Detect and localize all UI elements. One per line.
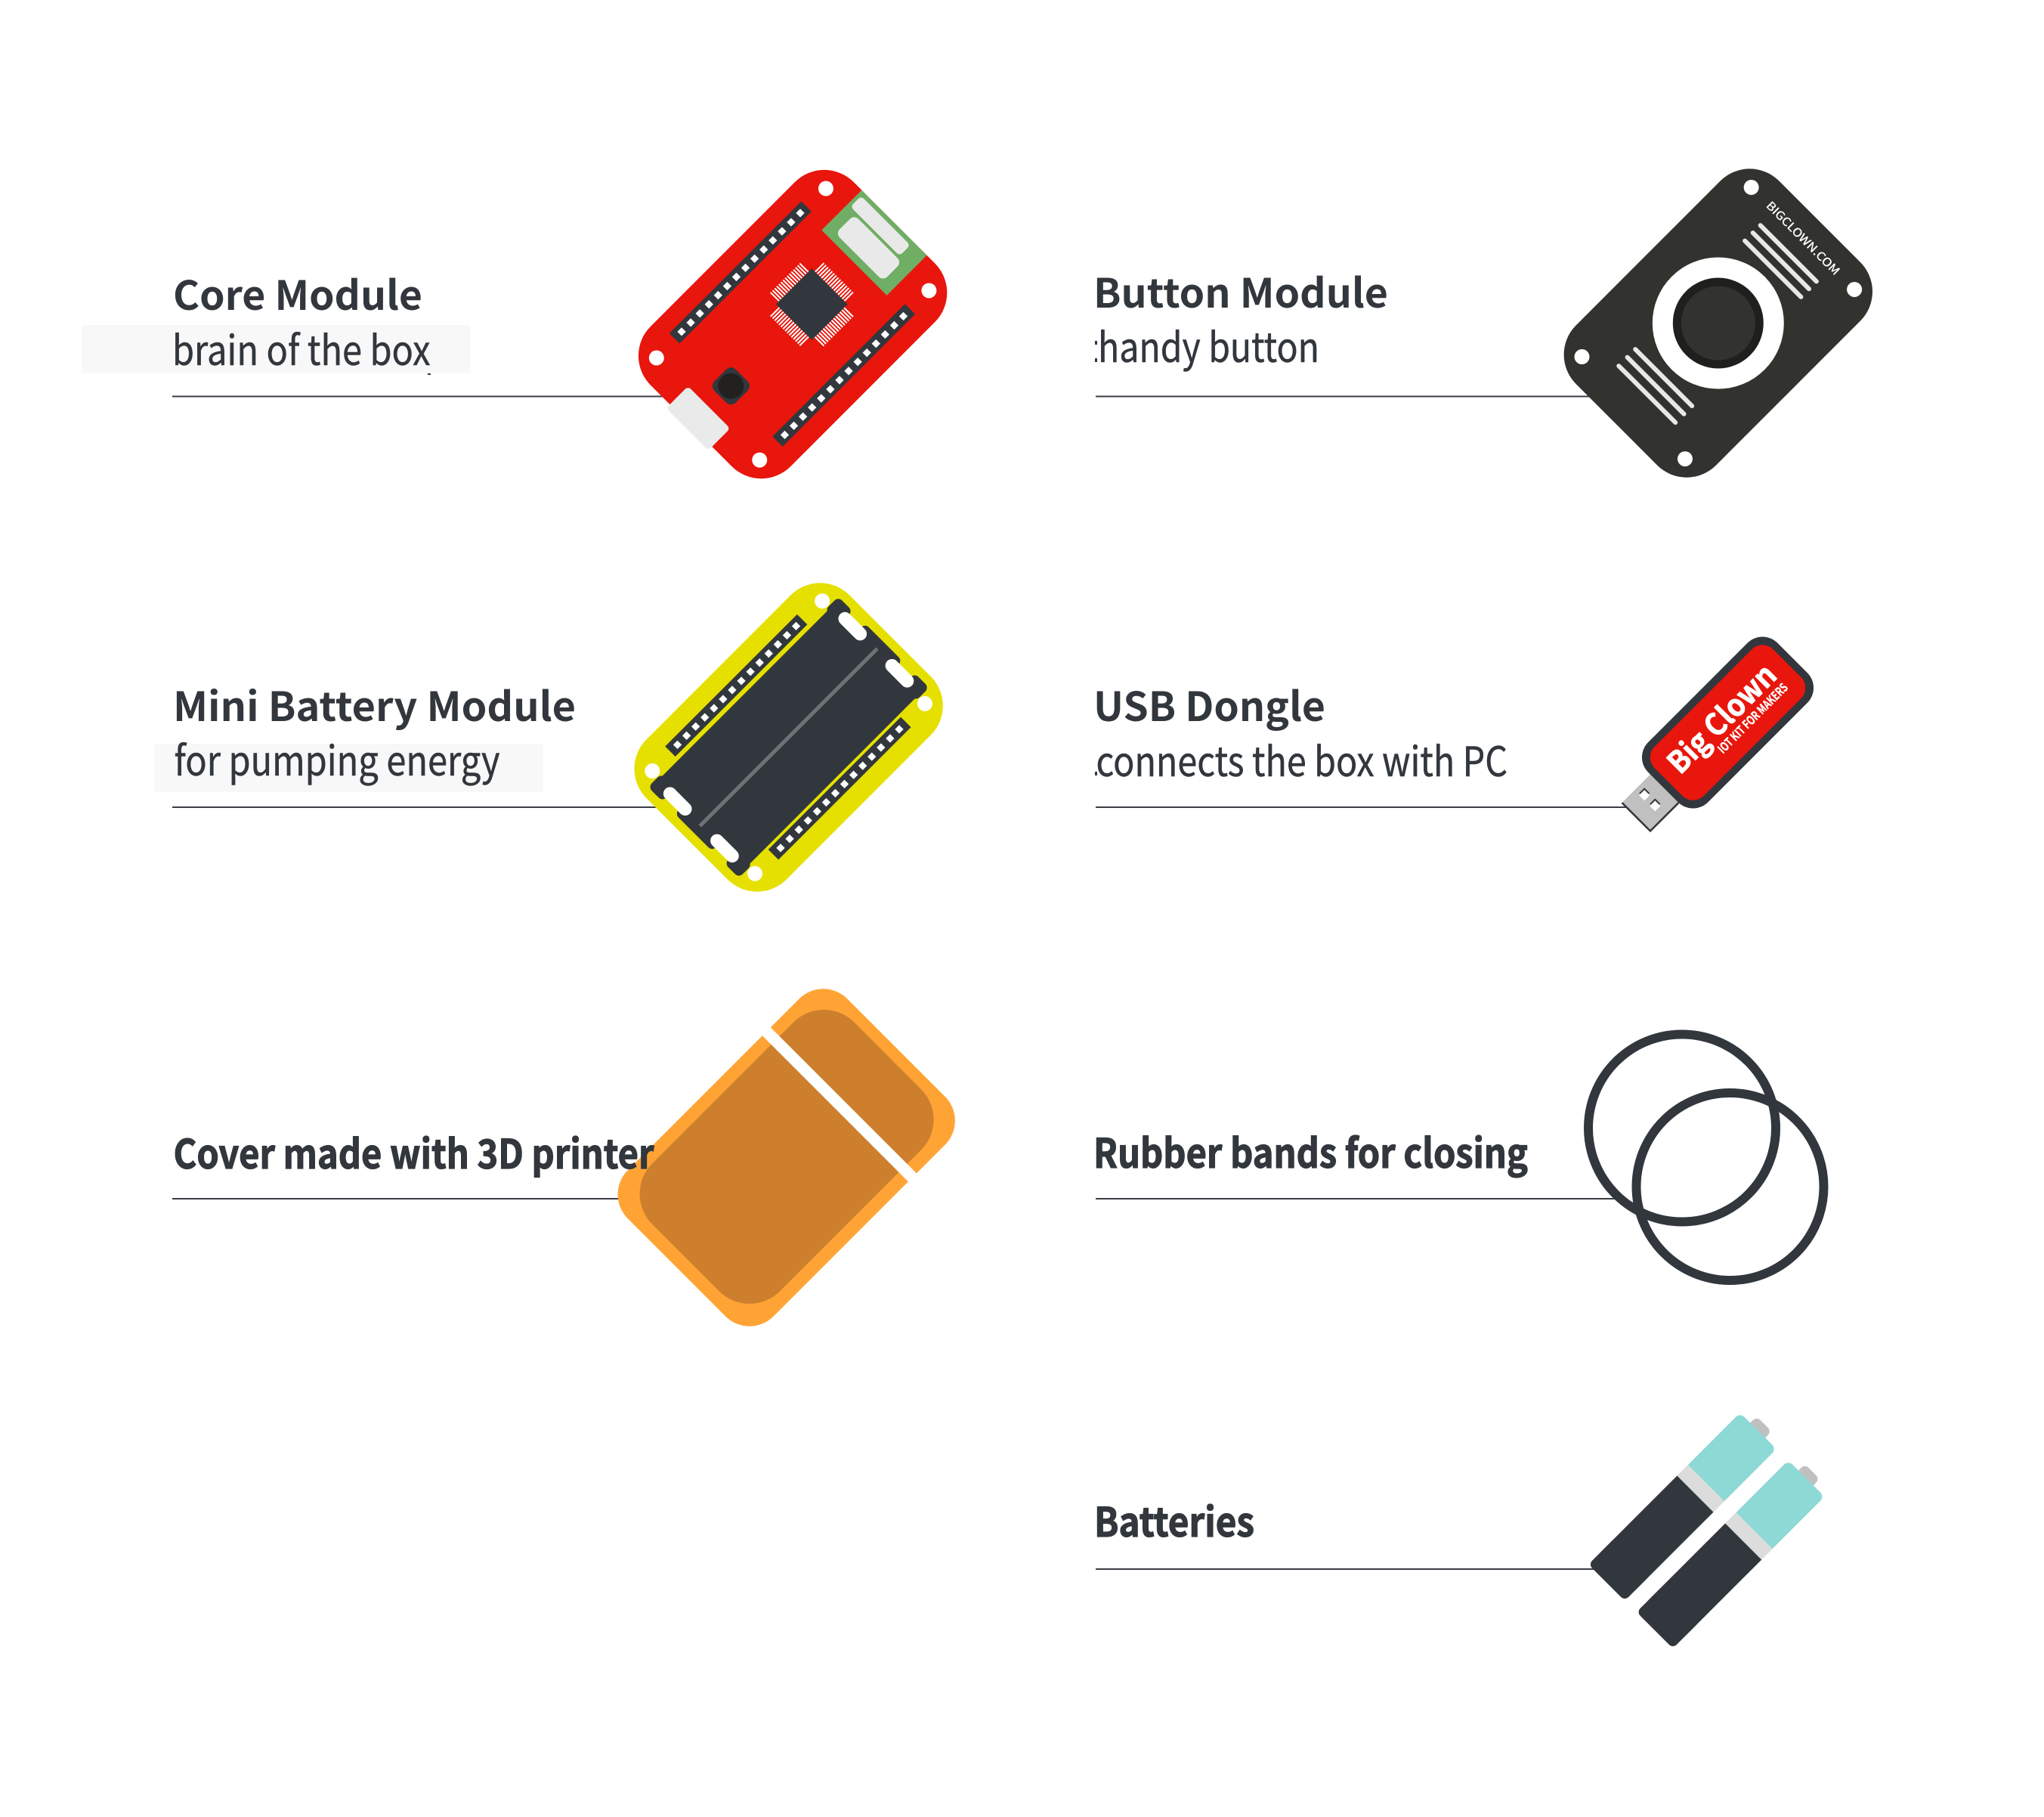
icon: battery two	[1637, 1454, 1831, 1648]
panel: core module label	[82, 265, 669, 396]
icon: button module board	[1547, 152, 1890, 494]
heading: core module: Core Module	[173, 265, 422, 322]
text: bigclown.com: BIGCLOWN.COM	[1763, 198, 1844, 278]
icon: rubber bands	[1588, 1034, 1824, 1280]
panel: mini battery module label	[154, 676, 661, 807]
icon: usb dongle	[1605, 628, 1823, 846]
panel: button module label	[1093, 262, 1598, 396]
text: mini battery subtitle: for pumping energy	[174, 728, 500, 788]
icon: core module board	[617, 153, 964, 500]
icon: mini battery module board	[617, 566, 960, 908]
text: core module subtitle: brain of the box	[172, 317, 431, 377]
text: usb dongle subtitle: connects the box with PC	[1096, 729, 1507, 788]
heading: rubber bands: Rubber bands for closing	[1093, 1122, 1528, 1180]
heading: mini battery module: Mini Battery Module	[173, 676, 576, 733]
icon: battery one	[1588, 1407, 1783, 1601]
text: big clown logo: Big Clown	[1656, 652, 1785, 782]
panel: usb dongle label	[1093, 676, 1632, 807]
heading: batteries: Batteries	[1094, 1491, 1254, 1549]
heading: cover made with 3d printer: Cover made with 3D printer	[174, 1123, 654, 1181]
heading: usb dongle: USB Dongle	[1093, 676, 1325, 733]
icon: batteries	[1588, 1407, 1831, 1648]
icon: 3d printed cover	[601, 972, 972, 1343]
text: iot kit for makers: IOT KIT FOR MAKERS	[1713, 678, 1792, 757]
text: button module subtitle: handy button	[1098, 314, 1319, 374]
heading: button module: Button Module	[1093, 262, 1388, 320]
